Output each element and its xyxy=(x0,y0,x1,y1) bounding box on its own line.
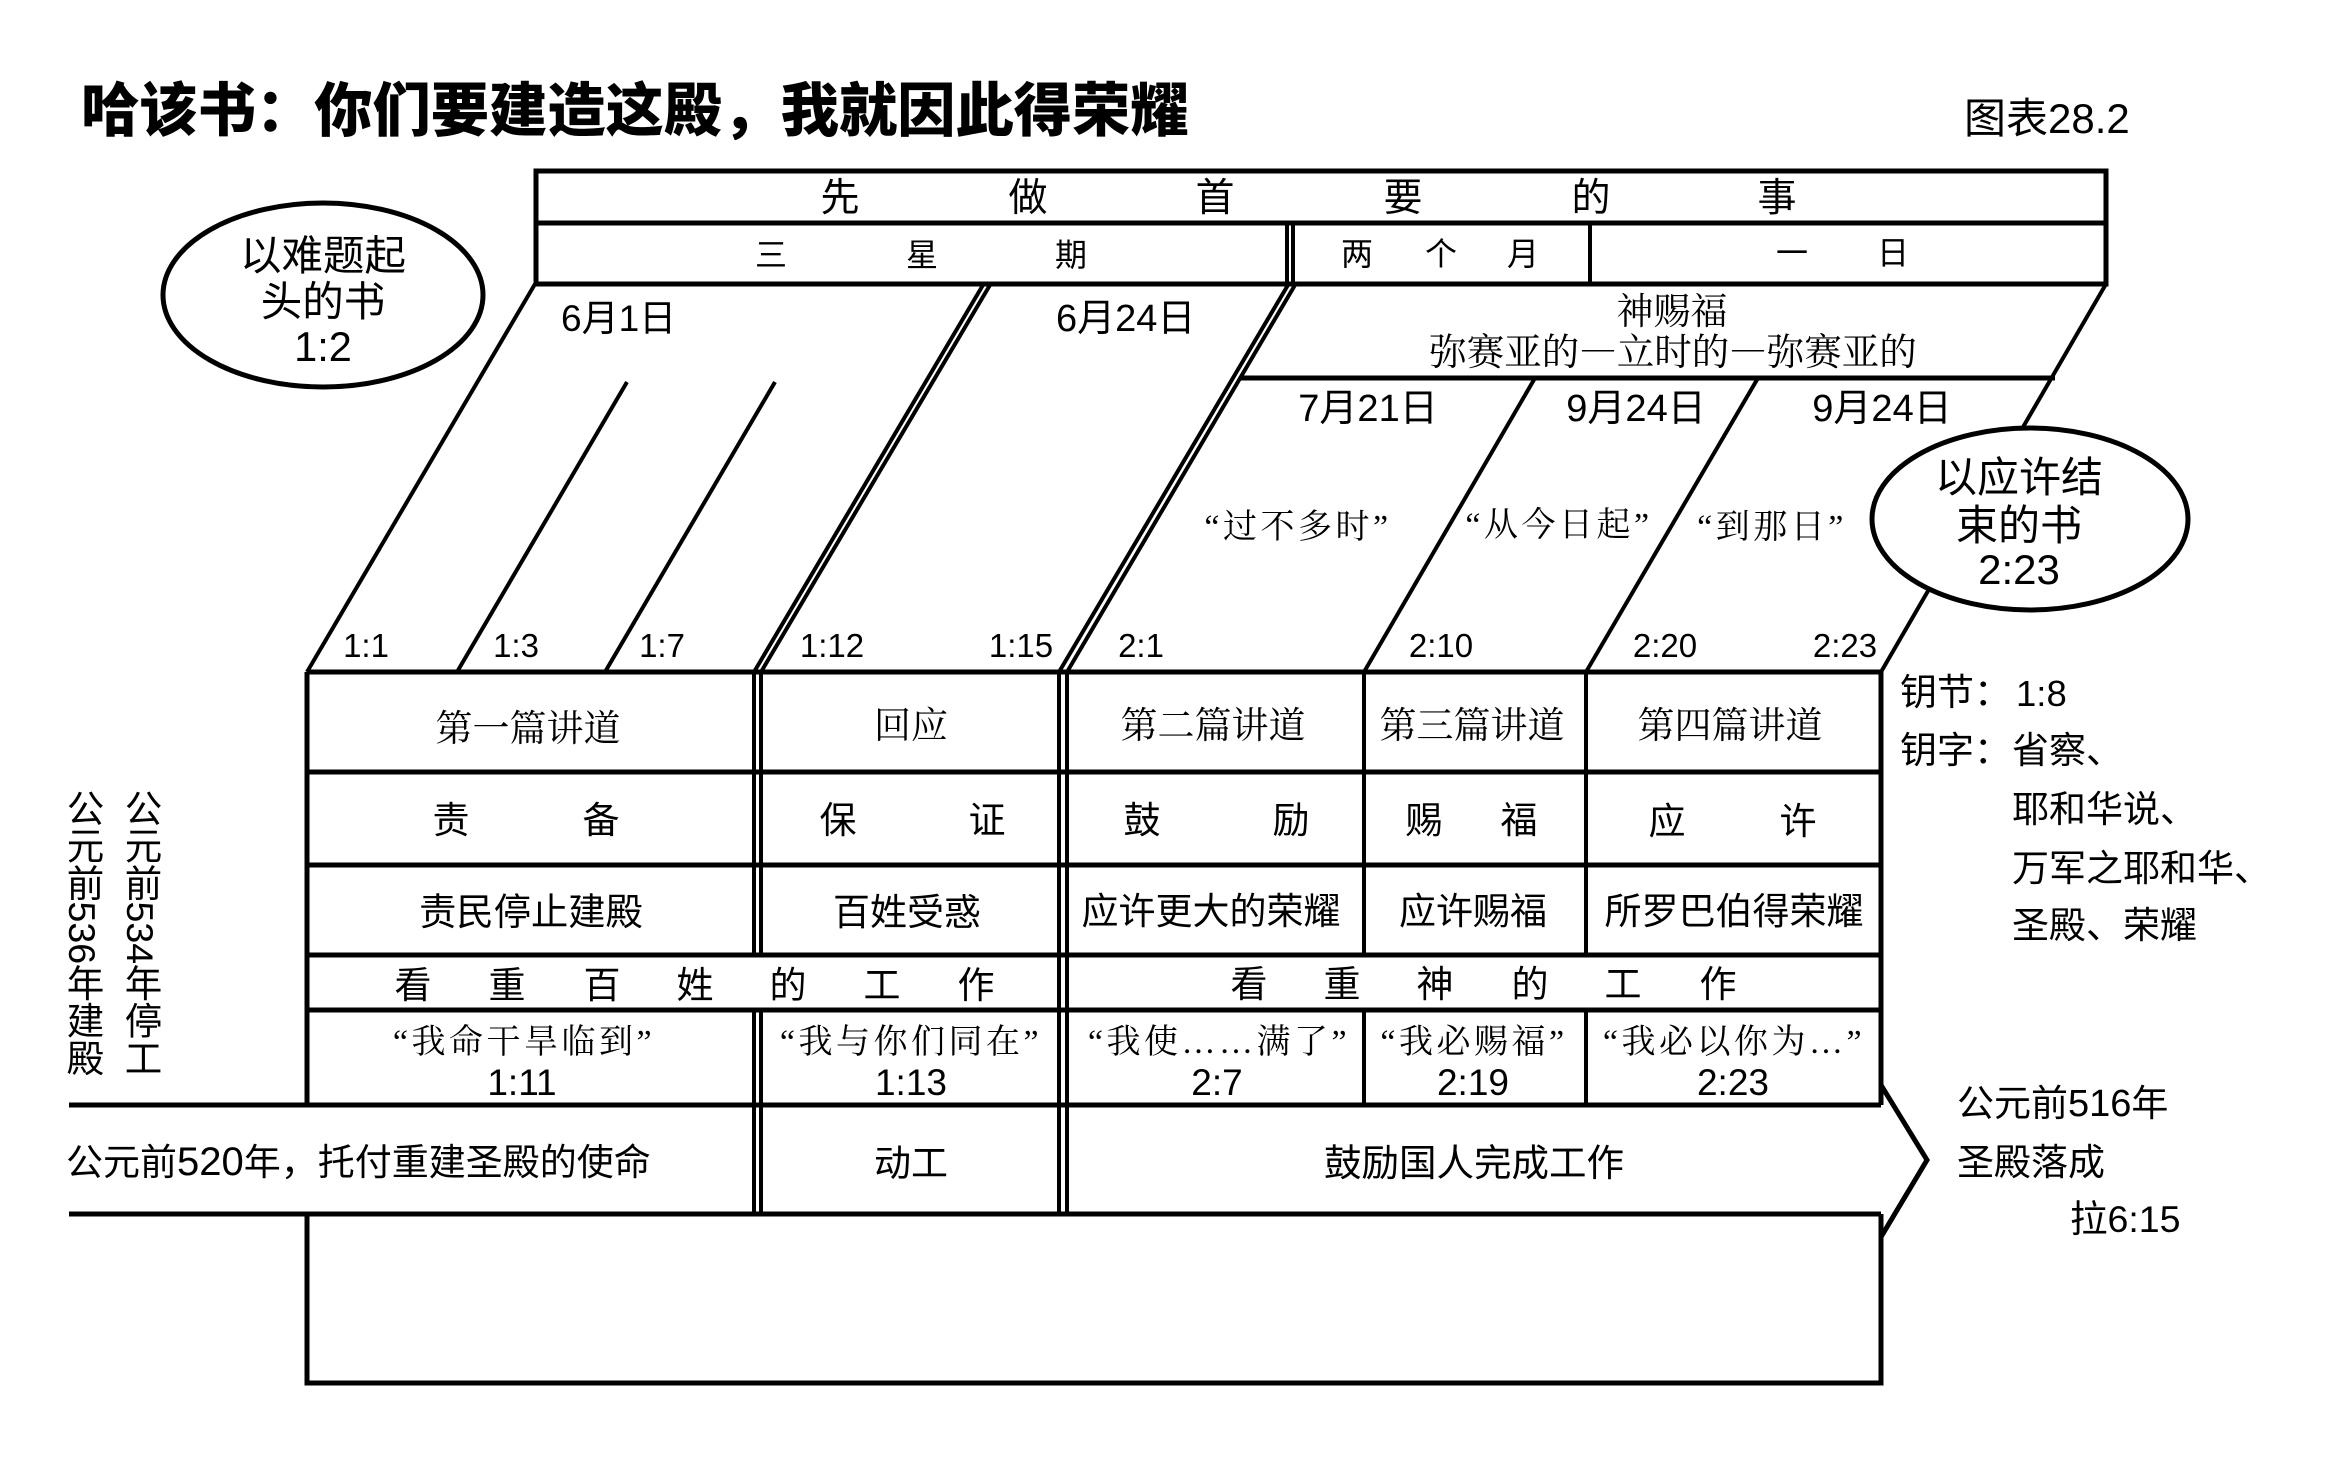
callout: ends with promise: 以应许结 xyxy=(1935,454,2103,501)
callout: ends with promise: 2:23 xyxy=(1978,546,2060,593)
row: sermons: 回应 xyxy=(874,695,948,749)
row: summaries: 应许赐福 xyxy=(1399,891,1547,932)
row: summaries: 应许更大的荣耀 xyxy=(1082,891,1340,932)
text: God blesses: 神赐福 xyxy=(1616,281,1728,335)
chart number: 图表28.2 xyxy=(1964,95,2130,142)
verse references: 2:23 xyxy=(1813,627,1877,664)
callout: begins with problem: 1:2 xyxy=(294,323,352,370)
row: quotes: 2:19 xyxy=(1437,1062,1509,1103)
panel: header bars xyxy=(536,171,2106,284)
side note: completion 516 BC: 拉6:15 xyxy=(2070,1198,2180,1240)
text: messianic: 弥赛亚的—立时的—弥赛亚的 xyxy=(1429,322,1917,376)
verse references: 2:10 xyxy=(1409,627,1473,664)
date: September 24: 9月24日 xyxy=(1566,388,1706,430)
empty lower box xyxy=(307,1214,1881,1383)
row: sermons: 第一篇讲道 xyxy=(436,698,620,752)
verse references: 1:12 xyxy=(800,627,864,664)
row: quotes: 1:11 xyxy=(487,1062,557,1103)
verse references: 1:1 xyxy=(343,627,389,664)
row: themes: 鼓励 xyxy=(1124,800,1310,841)
row: summaries: 百姓受惑 xyxy=(833,892,981,933)
row: themes: 应许 xyxy=(1648,801,1816,842)
verse references: 1:15 xyxy=(989,627,1053,664)
side note: key verse and words: 耶和华说、 xyxy=(2012,789,2197,830)
row: quotes: “我必以你为…” xyxy=(1603,1023,1865,1061)
row: quotes: “我使……满了” xyxy=(1088,1023,1350,1061)
row: themes: 赐福 xyxy=(1406,800,1538,841)
row: sermons xyxy=(436,695,1822,752)
row: emphasis: 看重百姓的工作 xyxy=(394,965,994,1006)
row: emphasis xyxy=(394,964,1736,1006)
row: summaries: 所罗巴伯得荣耀 xyxy=(1604,891,1864,932)
side note: key verse and words: 圣殿、荣耀 xyxy=(2012,905,2197,946)
date: June 24: 6月24日 xyxy=(1056,298,1195,340)
arrow band: temple timeline xyxy=(66,1085,1927,1237)
row: quotes: 1:13 xyxy=(875,1062,947,1103)
label: one day: 一日 xyxy=(1776,235,1909,271)
side note: key verse and words: 省察、 xyxy=(2012,730,2123,771)
verse references xyxy=(343,627,1877,664)
date: June 1: 6月1日 xyxy=(561,298,676,339)
callout: begins with problem xyxy=(163,203,483,387)
row: quotes: “我命干旱临到” xyxy=(393,1023,655,1061)
quote: on that day: “到那日” xyxy=(1697,509,1847,546)
row: themes: 保证 xyxy=(820,800,1006,841)
row: quotes: “我与你们同在” xyxy=(780,1023,1042,1061)
row: quotes: 2:7 xyxy=(1191,1062,1243,1103)
quote: in a little while: “过不多时” xyxy=(1204,508,1392,546)
side note: key verse and words: 1:8 xyxy=(2016,673,2067,714)
callout: begins with problem: 头的书 xyxy=(261,278,385,325)
text: begin work: 动工 xyxy=(874,1143,948,1184)
date: July 21: 7月21日 xyxy=(1298,388,1438,430)
side note: key verse and words xyxy=(1900,672,2271,946)
side note: completion 516 BC: 公元前516年 xyxy=(1957,1083,2168,1125)
label: two months: 两个月 xyxy=(1341,236,1539,272)
row: themes: 责备 xyxy=(432,800,620,841)
row: quotes: 2:23 xyxy=(1697,1062,1769,1103)
callout: begins with problem: 以难题起 xyxy=(240,232,406,279)
label: three weeks: 三星期 xyxy=(755,237,1087,273)
callout: ends with promise xyxy=(1872,428,2188,610)
side note: key verse and words: 万军之耶和华、 xyxy=(2012,848,2271,889)
panel: slanted timeline section xyxy=(307,281,2106,672)
title: 哈该书：你们要建造这殿，我就因此得荣耀 xyxy=(81,79,1189,144)
row: summaries: 责民停止建殿 xyxy=(419,891,643,933)
vertical text: 536 BC: 公元前536年建殿 xyxy=(61,789,104,1077)
side note: key verse and words: 钥字： xyxy=(1900,730,2011,771)
verse references: 1:7 xyxy=(639,627,685,664)
heading: first things first: 先做首要的事 xyxy=(820,177,1797,220)
text: commission 520 BC: 公元前520年，托付重建圣殿的使命 xyxy=(66,1140,651,1184)
callout: ends with promise: 束的书 xyxy=(1956,502,2082,549)
row: summaries xyxy=(419,891,1864,933)
verse references: 1:3 xyxy=(493,627,539,664)
row: themes xyxy=(432,800,1816,842)
panel: main table xyxy=(307,672,1881,1105)
text: encourage: 鼓励国人完成工作 xyxy=(1324,1142,1624,1184)
row: quotes xyxy=(393,1023,1865,1103)
row: sermons: 第二篇讲道 xyxy=(1120,695,1306,749)
row: sermons: 第三篇讲道 xyxy=(1380,695,1564,749)
side note: completion 516 BC xyxy=(1957,1083,2180,1240)
verse references: 2:1 xyxy=(1118,627,1164,664)
row: quotes: “我必赐福” xyxy=(1380,1024,1568,1061)
date: September 24 second: 9月24日 xyxy=(1812,388,1952,430)
vertical text: 534 BC: 公元前534年停工 xyxy=(119,789,161,1077)
side note: key verse and words: 钥节： xyxy=(1900,672,2011,713)
verse references: 2:20 xyxy=(1633,627,1697,664)
row: emphasis: 看重神的工作 xyxy=(1230,964,1736,1005)
row: sermons: 第四篇讲道 xyxy=(1638,695,1822,749)
quote: from this day: “从今日起” xyxy=(1465,506,1653,544)
side note: completion 516 BC: 圣殿落成 xyxy=(1957,1142,2105,1183)
